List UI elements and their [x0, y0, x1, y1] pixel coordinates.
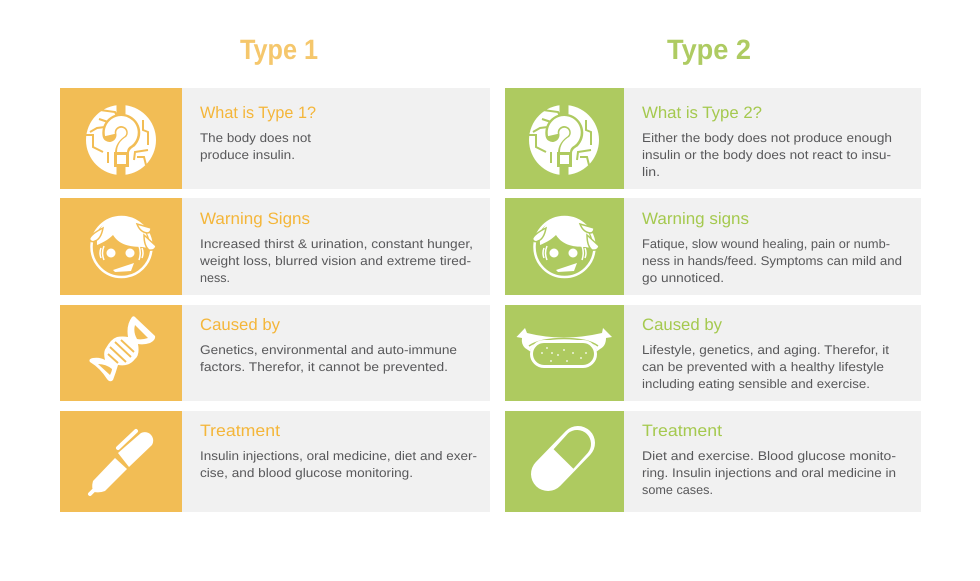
panel: treatment type 1: [60, 411, 490, 512]
text block: Increased thirst & urination, constant hunger,: [200, 237, 473, 251]
text block: ness in hands/feed. Symptoms can mild and: [642, 254, 902, 268]
icon: dna helix: [89, 316, 155, 381]
text block: including eating sensible and exercise.: [642, 377, 870, 391]
text block: weight loss, blurred vision and extreme tired-: [199, 254, 471, 268]
icon: worried face: [532, 217, 599, 277]
text block: [642, 131, 892, 179]
text block: some cases.: [642, 483, 713, 497]
text block: [200, 449, 477, 480]
icon: brain question mark: [529, 102, 599, 178]
icon: brain question mark: [86, 102, 156, 178]
text block: cise, and blood glucose monitoring.: [200, 466, 413, 480]
icon: worried face: [90, 217, 156, 277]
text block: ness.: [200, 271, 230, 285]
text block: Insulin injections, oral medicine, diet and exer-: [200, 449, 477, 463]
heading: Warning signs: [642, 210, 749, 228]
text block: [200, 131, 312, 162]
heading: Treatment: [642, 422, 722, 440]
heading: Caused by: [200, 316, 281, 334]
text block: [642, 343, 890, 391]
text block: insulin or the body does not react to insu-: [642, 148, 891, 162]
title: Type 1: Type 1: [240, 34, 318, 65]
text block: The body does not: [200, 131, 312, 145]
heading: Treatment: [200, 422, 280, 440]
text block: Fatique, slow wound healing, pain or numb-: [642, 237, 890, 251]
text block: factors. Therefor, it cannot be prevented.: [200, 360, 448, 374]
panel: what is type 2: [505, 88, 921, 189]
text block: Either the body does not produce enough: [642, 131, 892, 145]
heading: Warning Signs: [200, 210, 310, 228]
text block: can be prevented with a healthy lifestyle: [642, 360, 884, 374]
text block: produce insulin.: [200, 148, 295, 162]
panel: warning signs type 2: [505, 198, 921, 295]
text block: [642, 449, 896, 497]
text block: Genetics, environmental and auto-immune: [200, 343, 457, 357]
heading: Caused by: [642, 316, 723, 334]
text block: lin.: [642, 165, 660, 179]
text block: Lifestyle, genetics, and aging. Therefor, it: [642, 343, 890, 357]
heading: What is Type 2?: [642, 104, 762, 122]
heading: What is Type 1?: [200, 104, 316, 122]
text block: [199, 237, 473, 285]
icon: sausage in bun: [516, 328, 612, 368]
icon: insulin pen: [90, 431, 153, 494]
text block: [200, 343, 457, 374]
text block: Diet and exercise. Blood glucose monito-: [642, 449, 896, 463]
panel: caused by type 2: [505, 305, 921, 401]
title: Type 2: Type 2: [667, 34, 751, 65]
panel: treatment type 2: [505, 411, 921, 512]
text block: ring. Insulin injections and oral medicine in: [642, 466, 896, 480]
panel: what is type 1: [60, 88, 490, 189]
panel: warning signs type 1: [60, 198, 490, 295]
panel: caused by type 1: [60, 305, 490, 401]
text block: go unnoticed.: [642, 271, 724, 285]
text block: [642, 237, 902, 285]
icon: pill capsule: [548, 430, 591, 474]
